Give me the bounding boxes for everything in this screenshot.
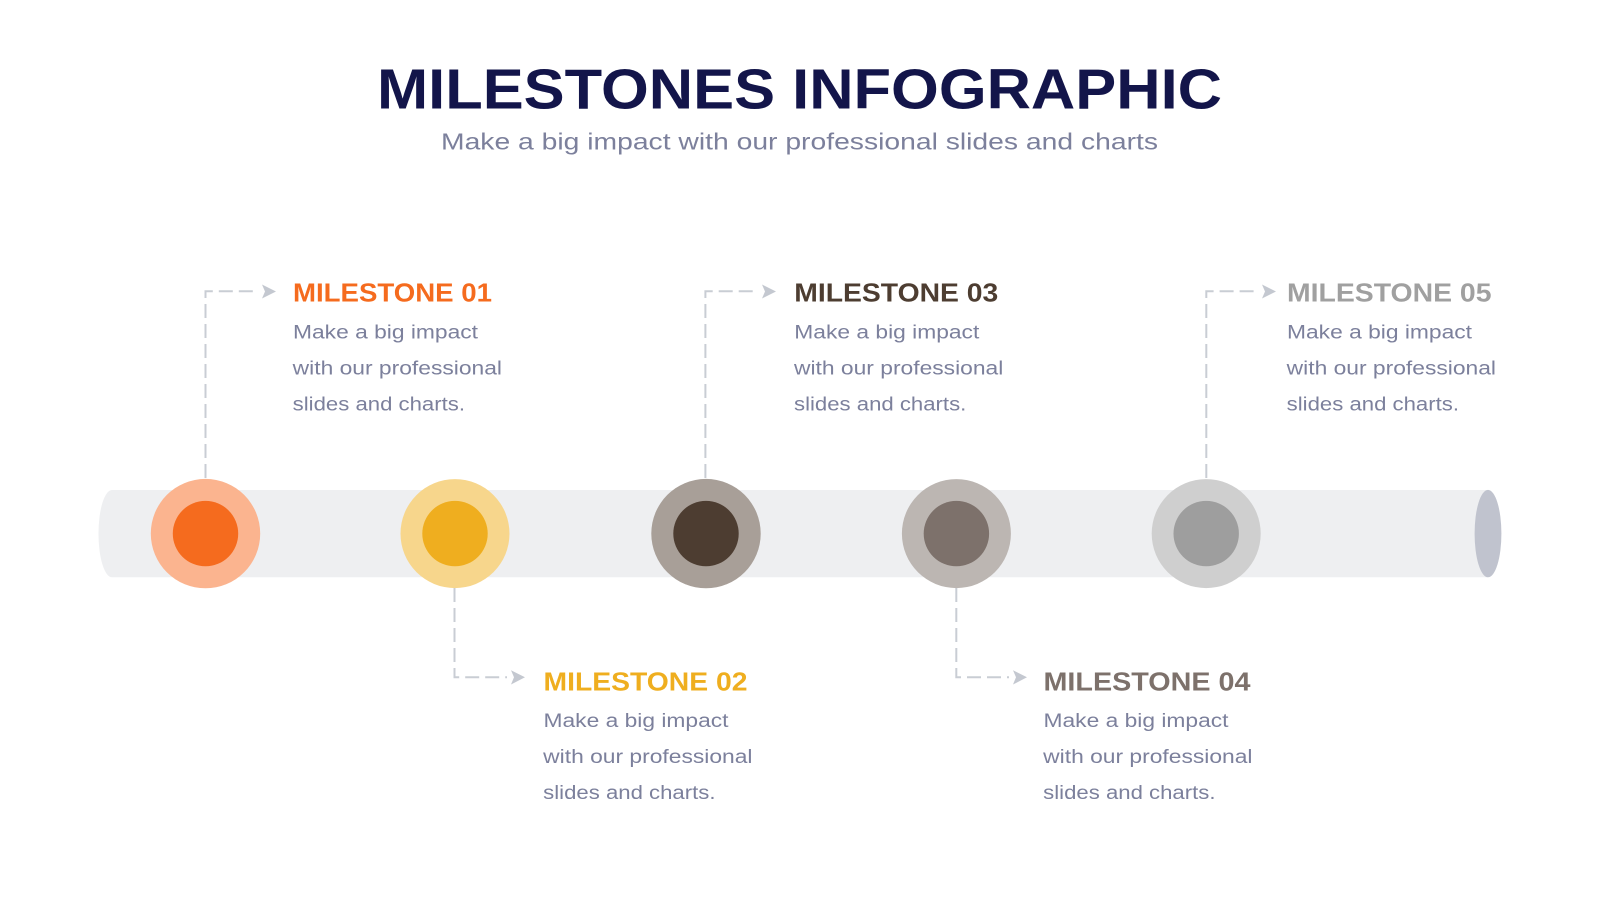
text block: milestone 02: MILESTONE 02 (544, 669, 748, 697)
text block: milestone 01: with our professional (292, 358, 502, 380)
marker: milestone 05 (1152, 479, 1261, 588)
connector: milestone 05 (1206, 284, 1276, 478)
text block: milestone 05: Make a big impact (1287, 322, 1473, 344)
text block: milestone 04: Make a big impact (1044, 710, 1229, 732)
text block: milestone 01: MILESTONE 01 (293, 280, 492, 308)
text block: milestone 03: Make a big impact (794, 322, 980, 344)
subtitle: Make a big impact with our professional slides and charts (441, 128, 1158, 154)
text block: milestone 03: MILESTONE 03 (794, 280, 998, 308)
text block: milestone 01: slides and charts. (293, 394, 465, 416)
text block: milestone 04 (1042, 669, 1252, 804)
marker: milestone 02 (400, 479, 510, 588)
timeline bar (98, 490, 1501, 577)
text block: milestone 02: with our professional (542, 746, 752, 768)
connector: milestone 01 (206, 284, 276, 478)
text block: milestone 01: Make a big impact (293, 322, 479, 344)
text block: milestone 05 (1286, 280, 1496, 416)
text block: milestone 03: with our professional (793, 358, 1003, 380)
marker: milestone 01 (151, 479, 260, 588)
text block: milestone 04: slides and charts. (1043, 782, 1216, 804)
text block: milestone 04: with our professional (1042, 746, 1252, 768)
marker: milestone 03 (651, 479, 761, 588)
text block: milestone 02: slides and charts. (543, 782, 716, 804)
text block: milestone 05: MILESTONE 05 (1287, 280, 1492, 308)
text block: milestone 03 (793, 280, 1003, 416)
text block: milestone 05: slides and charts. (1287, 394, 1459, 416)
connector: milestone 02 (454, 588, 525, 684)
text block: milestone 03: slides and charts. (794, 394, 966, 416)
text block: milestone 05: with our professional (1286, 358, 1496, 380)
title: MILESTONES INFOGRAPHIC (377, 58, 1222, 122)
connector: milestone 03 (705, 284, 776, 478)
text block: milestone 04: MILESTONE 04 (1044, 669, 1251, 697)
text block: milestone 02 (542, 669, 752, 804)
text block: milestone 01 (292, 280, 502, 416)
text block: milestone 02: Make a big impact (544, 710, 729, 732)
marker: milestone 04 (902, 479, 1011, 588)
connector: milestone 04 (956, 588, 1027, 684)
